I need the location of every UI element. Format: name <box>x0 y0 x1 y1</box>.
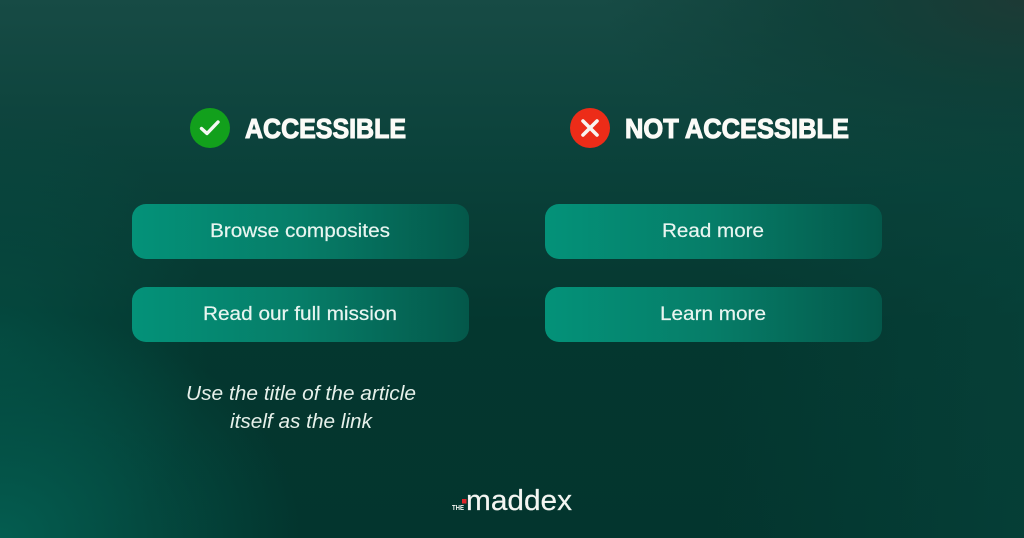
icon: green check <box>190 108 230 148</box>
button: learn more <box>545 287 882 342</box>
button: read more <box>545 204 882 259</box>
logo: the maddex: maddex <box>466 485 573 517</box>
panel: accessible column <box>132 108 469 433</box>
caption: use the title as the link: itself as the link <box>230 411 373 433</box>
button: browse composites: Browse composites <box>210 221 390 242</box>
icon: red cross <box>570 108 610 148</box>
panel: not accessible column <box>545 108 882 342</box>
button: browse composites <box>132 204 469 259</box>
button: read our full mission: Read our full mission <box>203 304 397 325</box>
heading: not accessible <box>570 108 849 148</box>
heading text: not accessible: NOT ACCESSIBLE <box>625 113 849 144</box>
heading text: accessible: ACCESSIBLE <box>245 113 406 144</box>
button: learn more: Learn more <box>660 304 766 325</box>
heading: accessible <box>190 108 406 148</box>
caption: use the title as the link: Use the title of the article <box>186 383 416 405</box>
logo: the maddex: THE <box>452 505 464 512</box>
caption: use the title as the link <box>186 383 416 433</box>
button: read more: Read more <box>662 221 764 242</box>
button: read our full mission <box>132 287 469 342</box>
